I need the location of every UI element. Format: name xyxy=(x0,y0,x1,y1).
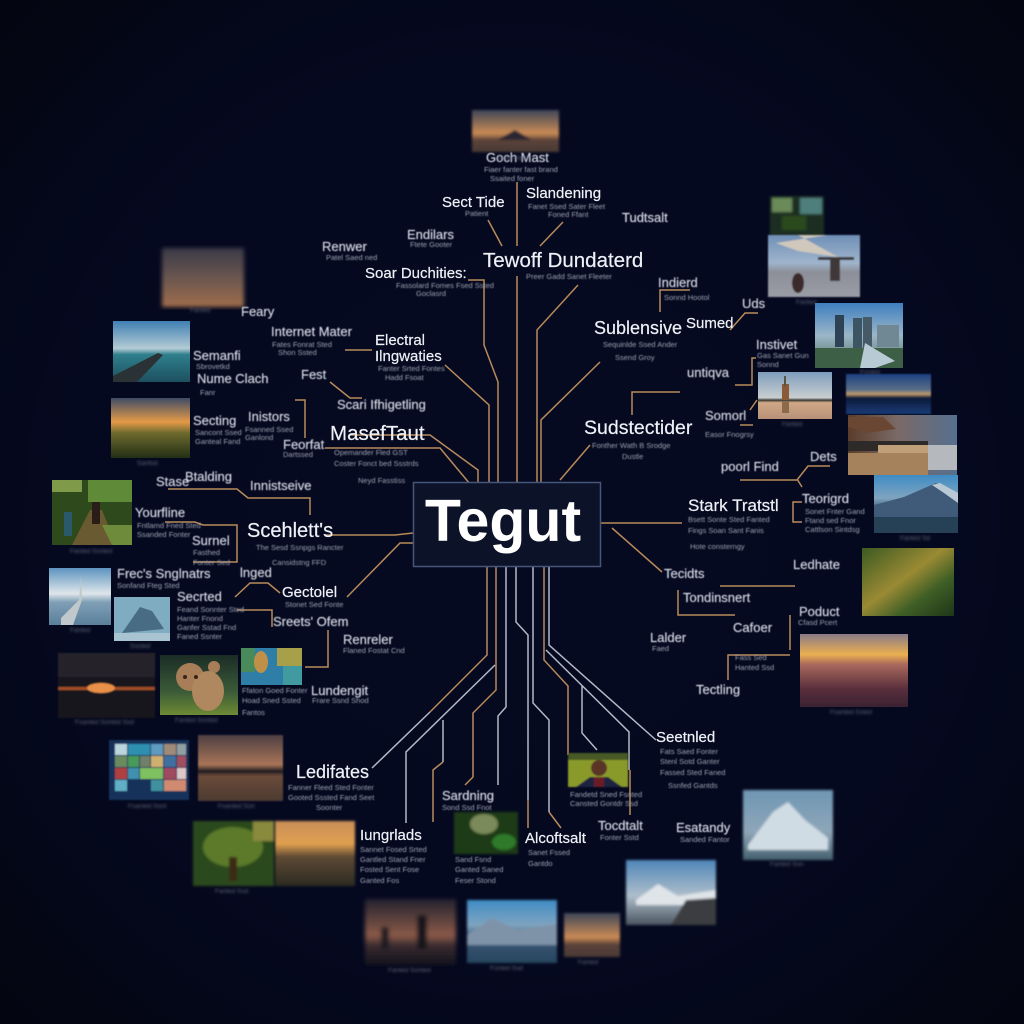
faint image captions: Fanted Ssnted xyxy=(70,548,113,555)
small captions: Hadd Fsoat xyxy=(385,373,425,382)
headings: Stase xyxy=(156,474,189,489)
small captions: Feand Sonnter Sted xyxy=(177,605,244,614)
headings: Gectolel xyxy=(282,584,337,601)
small captions: Flaned Fostat Cnd xyxy=(343,646,405,655)
small captions: Fanr xyxy=(200,388,216,397)
small captions: Sonnd xyxy=(757,360,779,369)
thumbnail: pavilion xyxy=(848,415,957,475)
headings: Scehlett's xyxy=(247,520,333,542)
headings: Feary xyxy=(241,304,275,319)
headings: Sreets' Ofem xyxy=(273,614,348,629)
small captions: Sbrovetkd xyxy=(196,362,230,371)
headings: lnged xyxy=(240,565,272,580)
headings: Seetnled xyxy=(656,729,715,746)
small captions: Opemander Fled GST xyxy=(334,448,408,457)
small captions: Preer Gadd Sanet Fleeter xyxy=(526,272,612,281)
small captions: Ssaited foner xyxy=(490,174,535,183)
headings: Alcoftsalt xyxy=(525,830,587,847)
faint image captions: Fanted xyxy=(782,421,803,428)
center title box xyxy=(414,482,600,566)
connector network xyxy=(165,182,830,828)
small captions: Patient xyxy=(465,209,489,218)
small captions: Stonet Sed Fonte xyxy=(285,600,343,609)
faint image captions: Ssnted xyxy=(130,643,151,650)
faint image captions: Fsanted Ssnt xyxy=(128,803,166,810)
headings: Ledhate xyxy=(793,557,840,572)
small captions: Sond Ssd Fnot xyxy=(442,803,493,812)
faint image captions: Fanted xyxy=(190,307,211,314)
faint image captions: Fanted Son xyxy=(770,861,804,868)
small captions: Frare Ssnd Shod xyxy=(312,696,369,705)
headings: Secrted xyxy=(177,589,222,604)
thumbnail: dim shore xyxy=(162,248,244,307)
small captions: Fassed Sted Faned xyxy=(660,768,725,777)
headings: Electral xyxy=(375,332,425,349)
small captions: Gantled Stand Fner xyxy=(360,855,426,864)
faint image captions: Sanfod xyxy=(137,460,158,467)
headings: Lalder xyxy=(650,630,687,645)
small captions: Ssanded Fonter xyxy=(137,530,191,539)
small captions: Fates Fonrat Sted xyxy=(272,340,332,349)
faint image captions: Fsnted xyxy=(860,369,880,376)
headings: Inistors xyxy=(248,409,290,424)
headings: Yourfline xyxy=(135,505,185,520)
headings: Renwer xyxy=(322,239,367,254)
thumbnail: green orchard xyxy=(862,548,954,616)
thumbnail: forest xyxy=(770,196,824,237)
small captions: Easor Fnogrsy xyxy=(705,430,754,439)
small captions: Ssnfed Gantds xyxy=(668,781,718,790)
small captions: Ffaton Goed Fonter xyxy=(242,686,308,695)
faint image captions xyxy=(70,155,930,974)
faint image captions: Fsanted Ssted xyxy=(830,709,872,716)
faint image captions: Fanted xyxy=(578,959,599,966)
headings: Iungrlads xyxy=(360,827,422,844)
thumbnail: pier over water xyxy=(49,568,111,625)
faint image captions: Fsanted Son xyxy=(218,803,255,810)
small captions: Fanner Fleed Sted Fonter xyxy=(288,783,374,792)
small captions: The Sesd Ssnpgs Rancter xyxy=(256,543,344,552)
thumbnail: dusk lake xyxy=(198,735,283,801)
headings: Sudstectider xyxy=(584,417,693,439)
faint image captions: Fanted Ssd xyxy=(215,888,249,895)
headings: poorl Find xyxy=(721,459,779,474)
small captions: Soonter xyxy=(316,803,343,812)
faint image captions: Fsanted Sonted Ssd xyxy=(75,719,134,726)
faint image captions: Fanted xyxy=(796,299,817,306)
headings: Sardning xyxy=(442,788,494,803)
small captions: Ganteal Fand xyxy=(195,437,240,446)
thumbnail: teddy bear xyxy=(160,655,238,715)
small captions: Sannet Fosed Srted xyxy=(360,845,427,854)
small captions: Cattlson Sintdsg xyxy=(805,525,860,534)
headings: Ledifates xyxy=(296,762,369,782)
thumbnail: snowy peak xyxy=(626,860,716,925)
thumbnail: tower at lake xyxy=(758,372,832,419)
small captions: Sancont Ssed xyxy=(195,428,242,437)
headings: Uds xyxy=(742,296,766,311)
headings: Tecidts xyxy=(664,566,705,581)
small captions: Gantdo xyxy=(528,859,553,868)
thumbnail: flare on horizon xyxy=(58,653,155,718)
headings: Stark Tratstl xyxy=(688,496,779,515)
small captions: Cfasd Pcert xyxy=(798,618,838,627)
headings: Endilars xyxy=(407,227,454,242)
small captions: Foned Ffant xyxy=(548,210,589,219)
small captions: Ganlond xyxy=(245,433,273,442)
small captions: Fonter Sed xyxy=(193,558,230,567)
headings: Nume Clach xyxy=(197,371,269,386)
headings: Indierd xyxy=(658,275,698,290)
small captions: Coster Fonct bed Ssstrds xyxy=(334,459,419,468)
small captions: Fiaer fanter fast brand xyxy=(484,165,558,174)
faint image captions: Fanted Sonted xyxy=(175,717,218,724)
thumbnail: green landscape xyxy=(454,812,518,854)
small captions: Fanet Ssed Sater Fleet xyxy=(528,202,606,211)
headings: Somorl xyxy=(705,408,746,423)
thumbnail: green tree xyxy=(193,821,274,886)
thumbnail: city skyline xyxy=(815,303,903,368)
thumbnail: golden field xyxy=(275,821,355,886)
headings: Sumed xyxy=(686,315,734,332)
small captions: Dustle xyxy=(622,452,643,461)
small captions: Sanet Fssed xyxy=(528,848,570,857)
headings: Lundengit xyxy=(311,683,368,698)
headings: Esatandy xyxy=(676,820,731,835)
thumbnail: dusk temple xyxy=(564,913,620,957)
thumbnail: sunset coast xyxy=(800,634,908,707)
small captions: Sonfand Fteg Sted xyxy=(117,581,180,590)
small captions: Gooted Sssted Fand Seet xyxy=(288,793,375,802)
small captions: Fassolard Fomes Fsed Ssted xyxy=(396,281,494,290)
small captions: Hanter Fnond xyxy=(177,614,223,623)
small captions: Feser Stond xyxy=(455,876,496,885)
small captions: Hote consterngy xyxy=(690,542,745,551)
small captions: Ganted Fos xyxy=(360,876,399,885)
center title box: Tegut xyxy=(425,488,581,554)
headings: Teorigrd xyxy=(802,491,849,506)
faint image captions: Fanted Sd xyxy=(900,535,930,542)
headings: Innistseive xyxy=(250,478,311,493)
thumbnail images ring xyxy=(49,110,958,965)
small captions: Cansted Gontdr Ssd xyxy=(570,799,638,808)
headings: Tectling xyxy=(696,682,740,697)
small captions: Hoad Sned Ssted xyxy=(242,696,301,705)
thumbnail: blue mountains xyxy=(874,475,958,533)
small captions: Hanted Ssd xyxy=(735,663,774,672)
thumbnail: coastal pier xyxy=(113,321,190,382)
small captions: Ganted Saned xyxy=(455,865,503,874)
small captions xyxy=(117,165,865,885)
thumbnail: figures in green park xyxy=(52,480,132,545)
faint image captions: Fand Sted xyxy=(498,155,528,162)
thumbnail: tile gallery xyxy=(109,740,189,800)
small captions: Sonet Fnter Gand xyxy=(805,507,865,516)
headings: Ilngwaties xyxy=(375,348,442,365)
headings: Sublensive xyxy=(594,318,682,338)
small captions: Dartssed xyxy=(283,450,313,459)
headings: Tewoff Dundaterd xyxy=(483,249,643,272)
small captions: Goclasrd xyxy=(416,289,446,298)
thumbnail: sky and camp xyxy=(768,235,860,297)
headings: Secting xyxy=(193,413,236,428)
faint image captions: Fanted Sonted xyxy=(388,967,431,974)
small captions: Neyd Fasstiss xyxy=(358,476,405,485)
thumbnail: night harbour xyxy=(846,374,931,414)
small captions: Sonnd Hootol xyxy=(664,293,710,302)
small captions: Fats Saed Fonter xyxy=(660,747,718,756)
thumbnail: foggy mountain xyxy=(743,790,833,860)
faint image captions: Fsnted Ssd xyxy=(490,965,523,972)
small captions: Fantos xyxy=(242,708,265,717)
headings: Dets xyxy=(810,449,837,464)
thumbnail: man portrait xyxy=(568,753,628,787)
small captions: Fonter Sstd xyxy=(600,833,639,842)
headings xyxy=(117,150,849,847)
small captions: Ssend Groy xyxy=(615,353,655,362)
faint image captions: Fanted xyxy=(70,627,91,634)
thumbnail: icy rock xyxy=(114,597,170,641)
small captions: Bsett Sonte Sted Fanted xyxy=(688,515,770,524)
headings: Cafoer xyxy=(733,620,773,635)
headings: Feorfat xyxy=(283,437,325,452)
headings: Surnel xyxy=(192,533,230,548)
small captions: Fsanned Ssed xyxy=(245,425,293,434)
thumbnail: top sunset xyxy=(472,110,559,152)
small captions: Shon Ssted xyxy=(278,348,317,357)
headings: Tudtsalt xyxy=(622,210,668,225)
headings: Tondinsnert xyxy=(683,590,751,605)
headings: Tocdtalt xyxy=(598,818,643,833)
headings: Poduct xyxy=(799,604,840,619)
small captions: Gas Sanet Gun xyxy=(757,351,809,360)
thumbnail: colourful portrait xyxy=(241,648,302,685)
small captions: Patel Saed ned xyxy=(326,253,377,262)
small captions: Fanter Srted Fontes xyxy=(378,364,445,373)
headings: Renreler xyxy=(343,632,394,647)
headings: Goch Mast xyxy=(486,150,549,165)
thumbnail: silhouettes at dusk xyxy=(365,899,456,965)
headings: Sect Tide xyxy=(442,194,505,211)
thumbnail: sunset hills xyxy=(111,398,190,458)
small captions: Faed xyxy=(652,644,669,653)
thumbnail: lake mountains xyxy=(467,900,557,963)
headings: Scari Ifhigetling xyxy=(337,397,426,412)
small captions: Sequinlde Ssed Ander xyxy=(603,340,678,349)
small captions: Ganfer Sstad Fnd xyxy=(177,623,236,632)
headings: Instivet xyxy=(756,337,798,352)
small captions: Sanded Fantor xyxy=(680,835,730,844)
small captions: Stenl Sotd Ganter xyxy=(660,757,720,766)
small captions: Fasthed xyxy=(193,548,220,557)
small captions: Fandetd Sned Fsnted xyxy=(570,790,642,799)
headings: Btalding xyxy=(185,469,232,484)
small captions: Fonther Wath B Srodge xyxy=(592,441,671,450)
headings: Internet Mater xyxy=(271,324,353,339)
headings: Fest xyxy=(301,367,327,382)
small captions: Faned Ssnter xyxy=(177,632,223,641)
small captions: Ftand sed Fnor xyxy=(805,516,856,525)
small captions: Ftete Gooter xyxy=(410,240,453,249)
small captions: Fntlamd Fned Sted xyxy=(137,521,201,530)
headings: untiqva xyxy=(687,365,730,380)
small captions: Sand Fsnd xyxy=(455,855,491,864)
small captions: Fings Soan Sant Fanis xyxy=(688,526,764,535)
headings: Slandening xyxy=(526,185,601,202)
headings: Frec's Snglnatrs xyxy=(117,566,211,581)
small captions: Fosted Sent Fose xyxy=(360,865,419,874)
small captions: Fass Sed xyxy=(735,653,767,662)
headings: MasefTaut xyxy=(330,422,425,445)
headings: Semanfi xyxy=(193,348,241,363)
headings: Soar Duchities: xyxy=(365,265,467,282)
small captions: Cansidstng FFD xyxy=(272,558,327,567)
